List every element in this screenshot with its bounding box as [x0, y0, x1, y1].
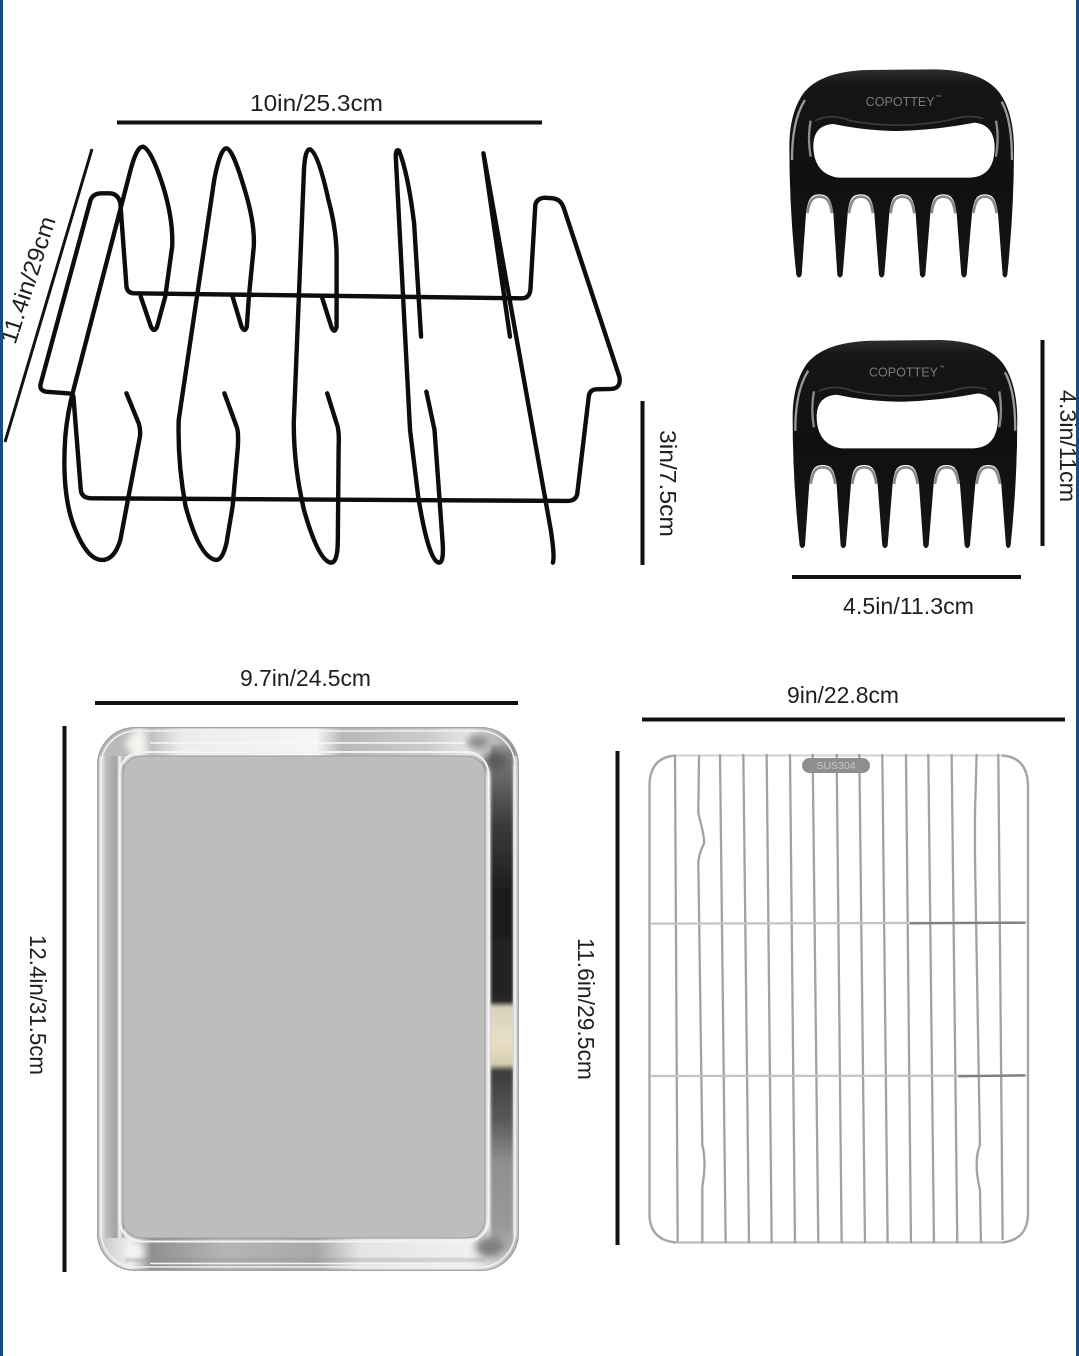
- icon: stainless steel tray: [92, 727, 524, 1271]
- dimension: rack height: [640, 401, 681, 565]
- dimension: rack width: [642, 682, 1065, 722]
- tray base: [123, 756, 485, 1238]
- dimension: tray width: 9.7in/24.5cm: [240, 665, 371, 691]
- icon: wire rib rack: [40, 147, 620, 563]
- icon: stainless wire rack: [650, 754, 1028, 1243]
- panel: cooling wire rack: [573, 682, 1065, 1245]
- icon: lower meat claw: [793, 340, 1017, 548]
- icon: upper meat claw: [789, 69, 1014, 277]
- dimension: rack length: [573, 751, 620, 1245]
- dimension: rack width: 9in/22.8cm: [787, 682, 899, 708]
- left blue border: [0, 0, 3, 1356]
- panel: meat claws: [789, 69, 1079, 619]
- dimension: rack depth: [0, 149, 92, 442]
- right blue border: [1076, 0, 1079, 1356]
- dimension: claw height: [1040, 340, 1079, 546]
- dimension: rack width: 10in/25.3cm: [250, 90, 383, 116]
- label tag: SUS304: SUS304: [816, 760, 856, 772]
- panel: rib rack: [0, 90, 681, 565]
- dimension: tray length: 12.4in/31.5cm: [25, 935, 51, 1075]
- icon: lower meat claw: COPOTTEY: [869, 365, 938, 380]
- dimension: rack height: 3in/7.5cm: [655, 430, 681, 537]
- tray rim highlights: [98, 728, 518, 1270]
- dimension: rack width: [117, 90, 542, 124]
- icon: upper meat claw: COPOTTEY: [866, 94, 935, 109]
- dimension: claw width: [792, 575, 1021, 619]
- icon: lower meat claw: ™: [939, 365, 944, 371]
- dimension: tray width: [95, 665, 518, 705]
- dimension: rack length: 11.6in/29.5cm: [573, 938, 599, 1080]
- dimension: claw width: 4.5in/11.3cm: [843, 593, 974, 619]
- dimension: tray length: [25, 726, 66, 1272]
- panel: baking tray: [25, 665, 524, 1272]
- icon: upper meat claw: ™: [936, 94, 941, 100]
- label tag: SUS304: [802, 758, 870, 773]
